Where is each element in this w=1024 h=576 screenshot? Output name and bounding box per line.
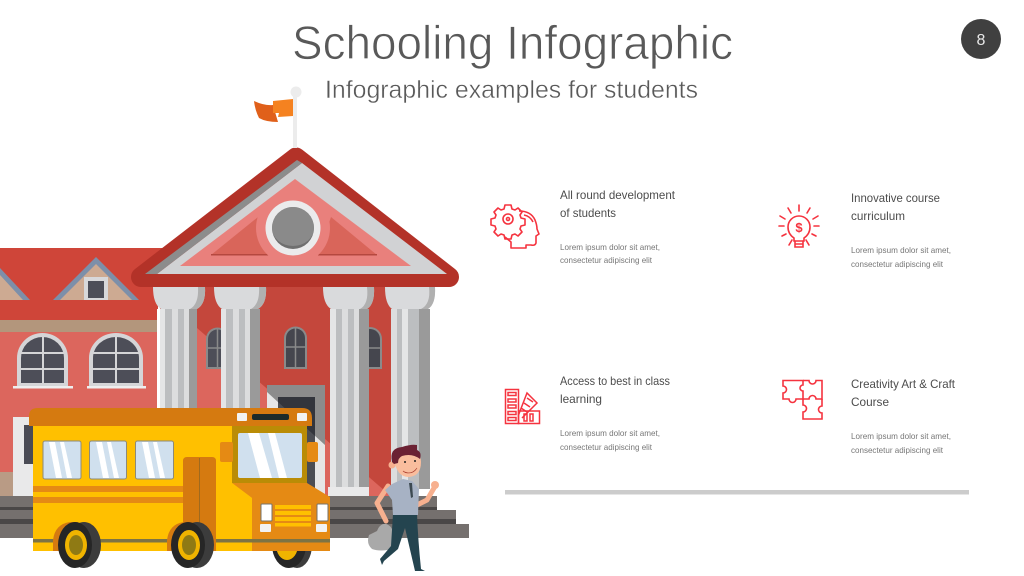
feature: access to best in class learning	[506, 374, 670, 452]
body text	[560, 242, 660, 265]
page number badge: 8	[977, 32, 986, 49]
columns	[153, 287, 435, 497]
bus body	[29, 408, 330, 551]
body text: consectetur adipiscing elit	[851, 445, 944, 455]
heading: learning	[560, 392, 602, 406]
heading: curriculum	[851, 209, 905, 223]
heading: Creativity Art & Craft	[851, 377, 956, 391]
feature: innovative course curriculum	[779, 191, 951, 269]
roof lights	[237, 413, 307, 421]
heading: Access to best in class	[560, 374, 670, 388]
icon: gear and head	[491, 205, 539, 248]
title: Schooling Infographic	[292, 16, 733, 69]
icon: light bulb with dollar	[779, 205, 819, 247]
left wing of building	[0, 248, 182, 497]
heading	[560, 188, 676, 220]
head	[388, 445, 421, 477]
body text: Lorem ipsum dolor sit amet,	[560, 428, 660, 438]
body text: consectetur adipiscing elit	[851, 259, 944, 269]
bag	[368, 524, 393, 550]
heading	[851, 377, 956, 409]
heading: Innovative course	[851, 191, 940, 205]
arms	[377, 486, 434, 521]
front steps	[0, 496, 469, 538]
far front wheel	[272, 522, 312, 568]
icon: light bulb with dollar: $	[795, 220, 803, 235]
feature: all round development	[491, 188, 676, 265]
flag	[254, 86, 302, 148]
illustration: school building	[0, 86, 449, 497]
illustration: student	[368, 445, 439, 571]
baseline rule	[505, 490, 969, 494]
shirt	[385, 479, 419, 515]
body text	[851, 245, 951, 269]
illustration: school bus	[29, 408, 330, 568]
subtitle: Infographic examples for students	[325, 76, 698, 104]
rear wheel	[53, 522, 101, 568]
windshield and mirrors	[220, 433, 318, 478]
icon: colour swatches	[506, 390, 540, 424]
body text: Lorem ipsum dolor sit amet,	[560, 242, 660, 252]
body text	[851, 431, 951, 455]
central wall	[160, 287, 392, 497]
icon: puzzle pieces	[783, 380, 822, 419]
feature: creativity art and craft course	[783, 377, 956, 455]
heading: Course	[851, 395, 889, 409]
tie	[409, 483, 413, 498]
bus windows	[43, 441, 174, 479]
legs	[380, 514, 425, 571]
body text: Lorem ipsum dolor sit amet,	[851, 431, 951, 441]
heading: All round development	[560, 188, 676, 202]
heading	[851, 191, 940, 223]
bus door	[183, 457, 216, 551]
pediment roof	[141, 158, 449, 277]
heading: of students	[560, 206, 616, 220]
body text	[560, 428, 660, 452]
headlights and grille	[260, 504, 328, 532]
heading	[560, 374, 670, 406]
body text: consectetur adipiscing elit	[560, 442, 653, 452]
page number badge	[961, 19, 1001, 59]
fist	[431, 481, 439, 489]
body text: consectetur adipiscing elit	[560, 255, 653, 265]
middle wheel	[167, 522, 214, 568]
body text: Lorem ipsum dolor sit amet,	[851, 245, 951, 255]
